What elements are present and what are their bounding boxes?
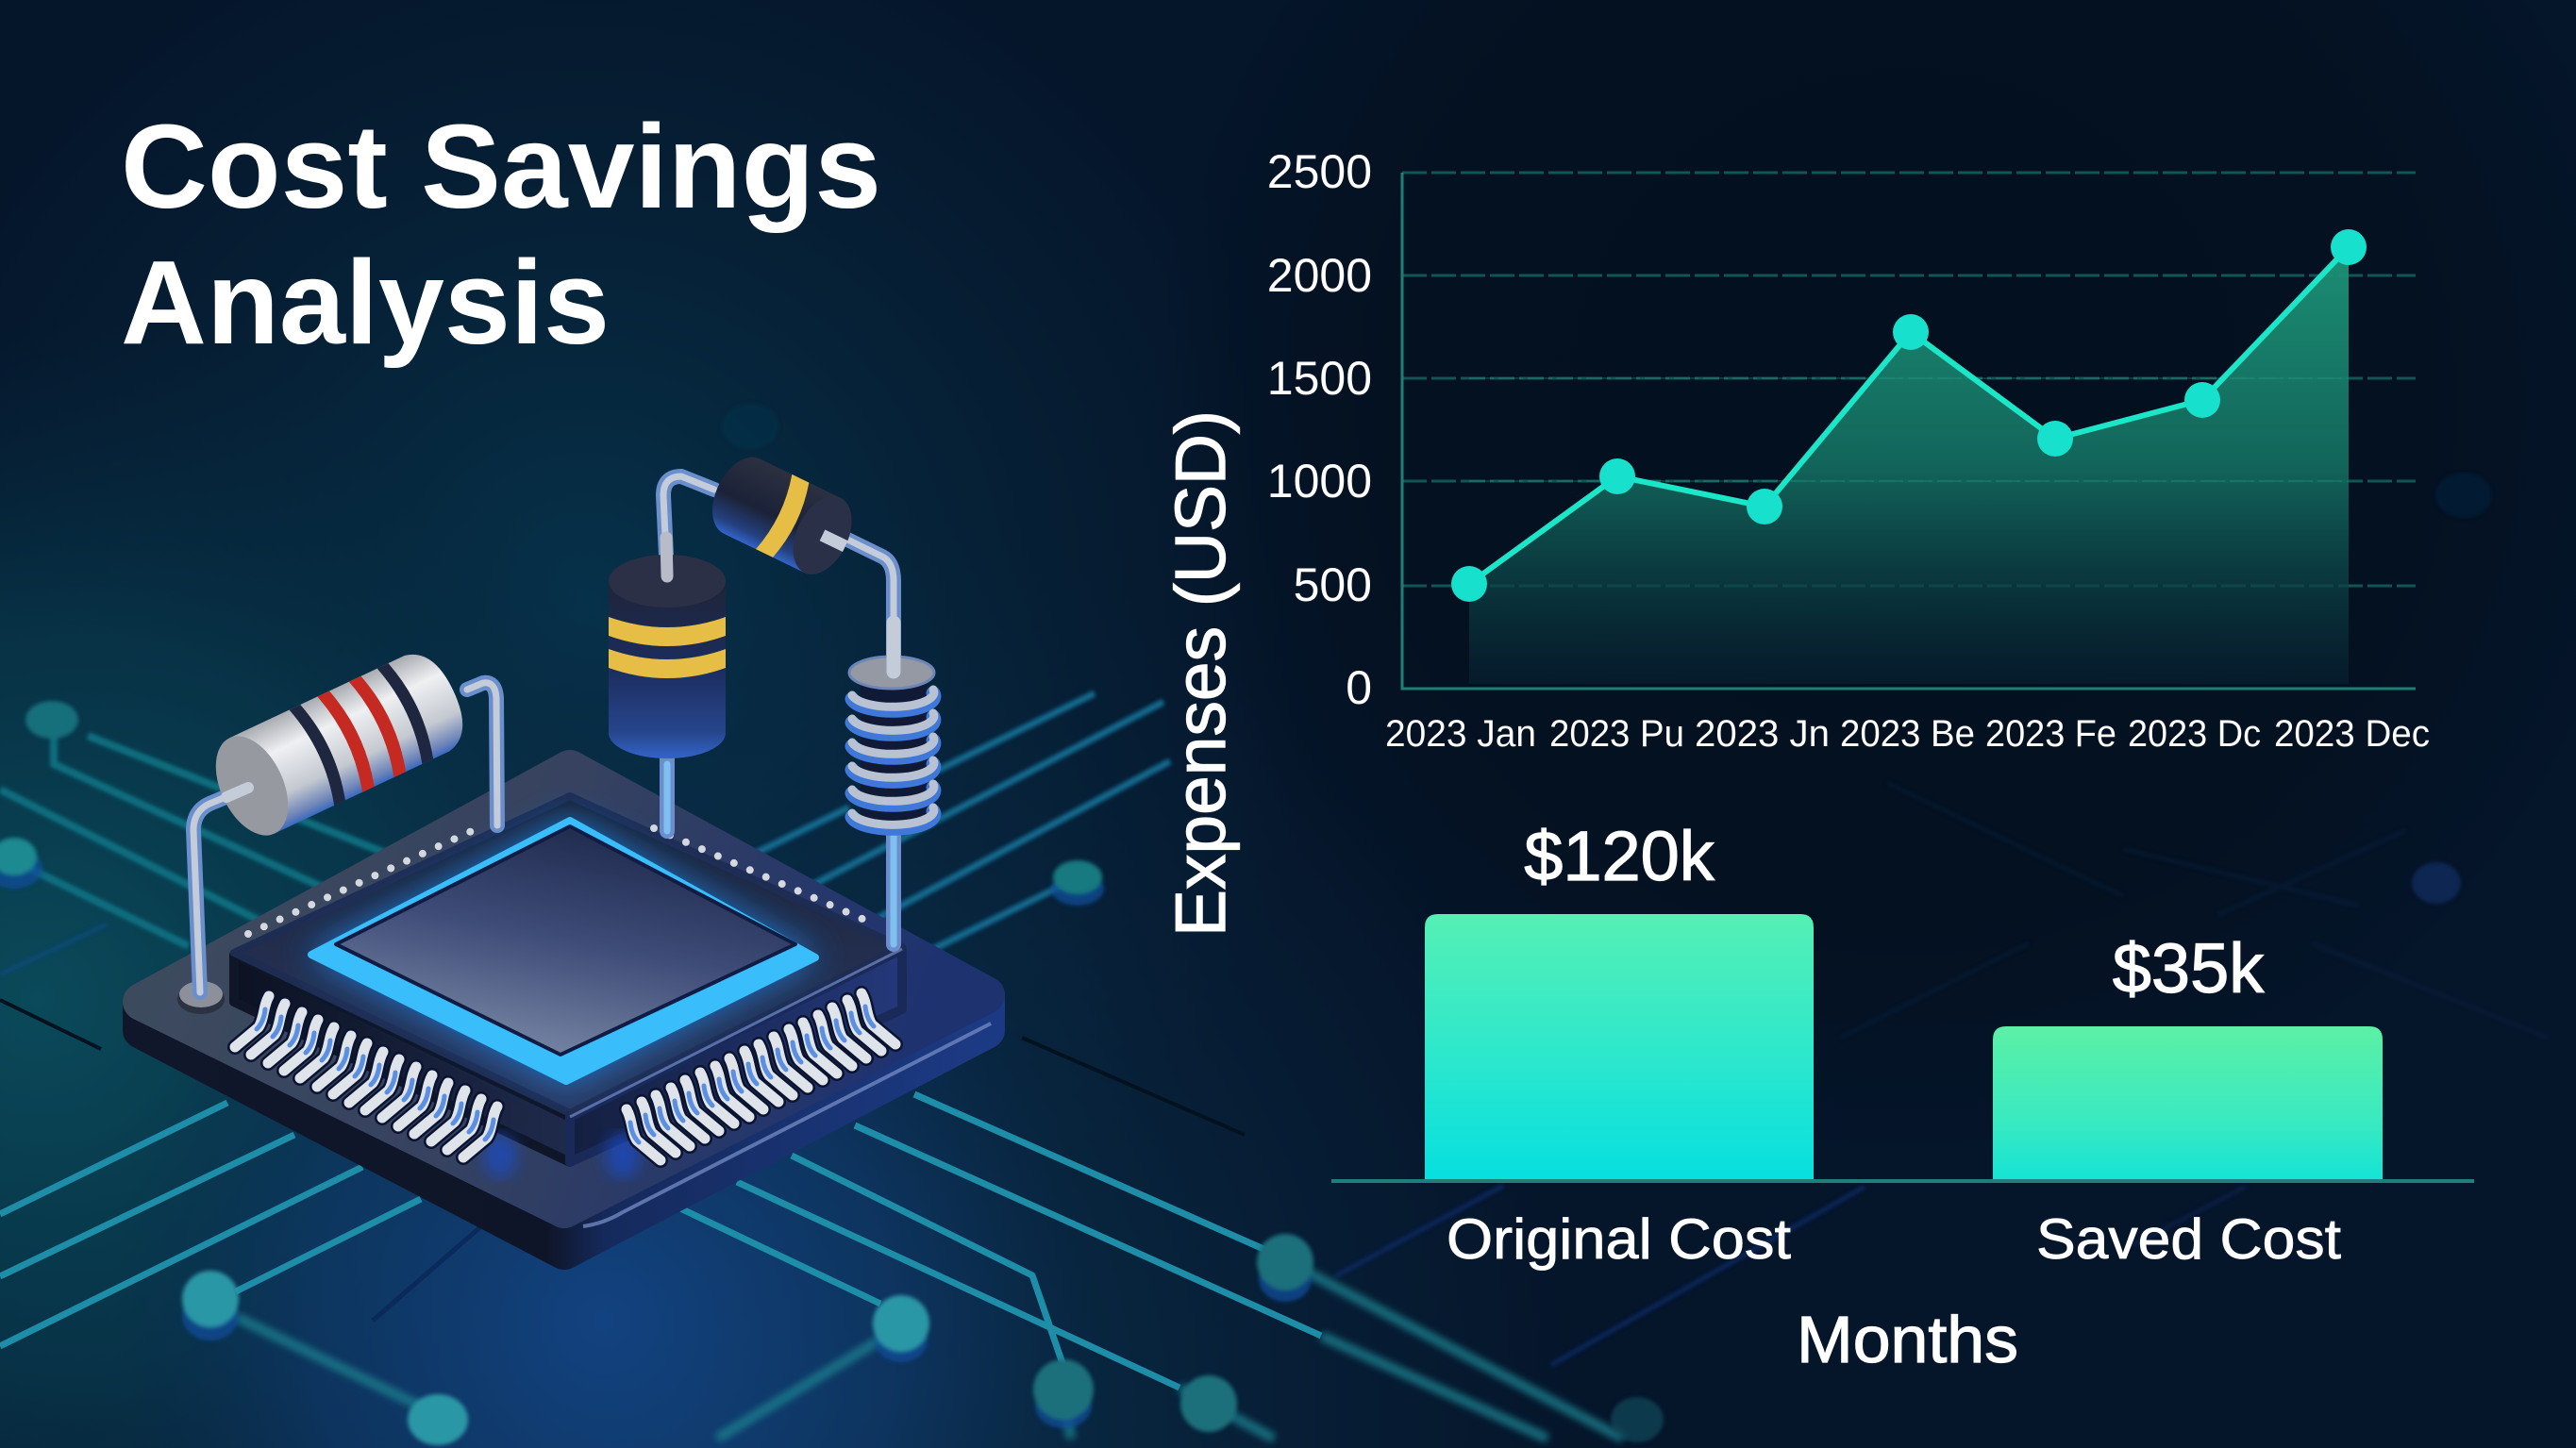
x axis tick labels: 2023 Pu [1549, 713, 1684, 755]
component leads [193, 476, 894, 992]
chip contact dots [248, 828, 864, 934]
x axis tick labels [1385, 713, 2430, 755]
pin glow [483, 1133, 640, 1178]
inductor coil [849, 623, 934, 828]
area under line [1469, 247, 2349, 684]
bar value labels: $35k [2113, 929, 2265, 1007]
bar: original cost [1425, 914, 1814, 1181]
x axis tick labels: 2023 Jn [1695, 713, 1830, 755]
chip base plate [142, 769, 991, 1251]
line chart: expenses by month [1267, 145, 2430, 755]
bar: saved cost [1993, 1026, 2383, 1181]
chip lid [336, 826, 795, 1055]
x axis tick labels: 2023 Fe [1985, 713, 2116, 755]
bar category labels: Original Cost [1447, 1207, 1791, 1271]
glowing blue ring [308, 817, 819, 1085]
chip body [234, 796, 902, 1162]
y axis tick labels: 0 [1346, 661, 1372, 714]
bar value labels [1524, 817, 2265, 1007]
capacitor [609, 538, 726, 758]
x axis tick labels: 2023 Jan [1385, 713, 1536, 755]
bar chart: cost comparison [1331, 817, 2474, 1376]
right pin row [627, 993, 895, 1160]
bar value labels: $120k [1524, 817, 1715, 895]
y axis tick labels: 2000 [1267, 249, 1372, 302]
resistor lead stub [226, 788, 248, 797]
title [121, 100, 881, 369]
y axis tick labels: 500 [1294, 558, 1372, 611]
gridlines over area [1469, 378, 2349, 481]
title: Cost Savings [121, 100, 881, 233]
x axis tick labels: 2023 Dc [2128, 713, 2261, 755]
x axis tick labels: 2023 Dec [2274, 713, 2430, 755]
x axis tick labels: 2023 Be [1840, 713, 1975, 755]
background: faint panel grid lines [0, 783, 2548, 1365]
y axis tick labels [1267, 145, 1372, 714]
lead solder pad [177, 981, 225, 1014]
illustration: microchip with components [142, 448, 991, 1251]
bar category labels: Saved Cost [2036, 1207, 2341, 1271]
background: circuit traces [0, 693, 1623, 1439]
diode [701, 448, 863, 584]
y axis tick labels: 1500 [1267, 352, 1372, 405]
bar category labels [1447, 1207, 2341, 1271]
background: circuit nodes [0, 404, 2492, 1445]
y axis title: Expenses (USD) [1161, 410, 1240, 937]
data points [1451, 229, 2367, 602]
bar baseline [1331, 1179, 2474, 1183]
title: Analysis [121, 236, 610, 369]
x axis title: Months [1797, 1303, 2018, 1376]
left pin row [235, 996, 497, 1157]
chart axes [1402, 173, 2416, 689]
y axis tick labels: 1000 [1267, 455, 1372, 508]
resistor [201, 643, 476, 847]
chart gridlines [1402, 173, 2416, 586]
data line [1469, 247, 2349, 584]
y axis tick labels: 2500 [1267, 145, 1372, 198]
